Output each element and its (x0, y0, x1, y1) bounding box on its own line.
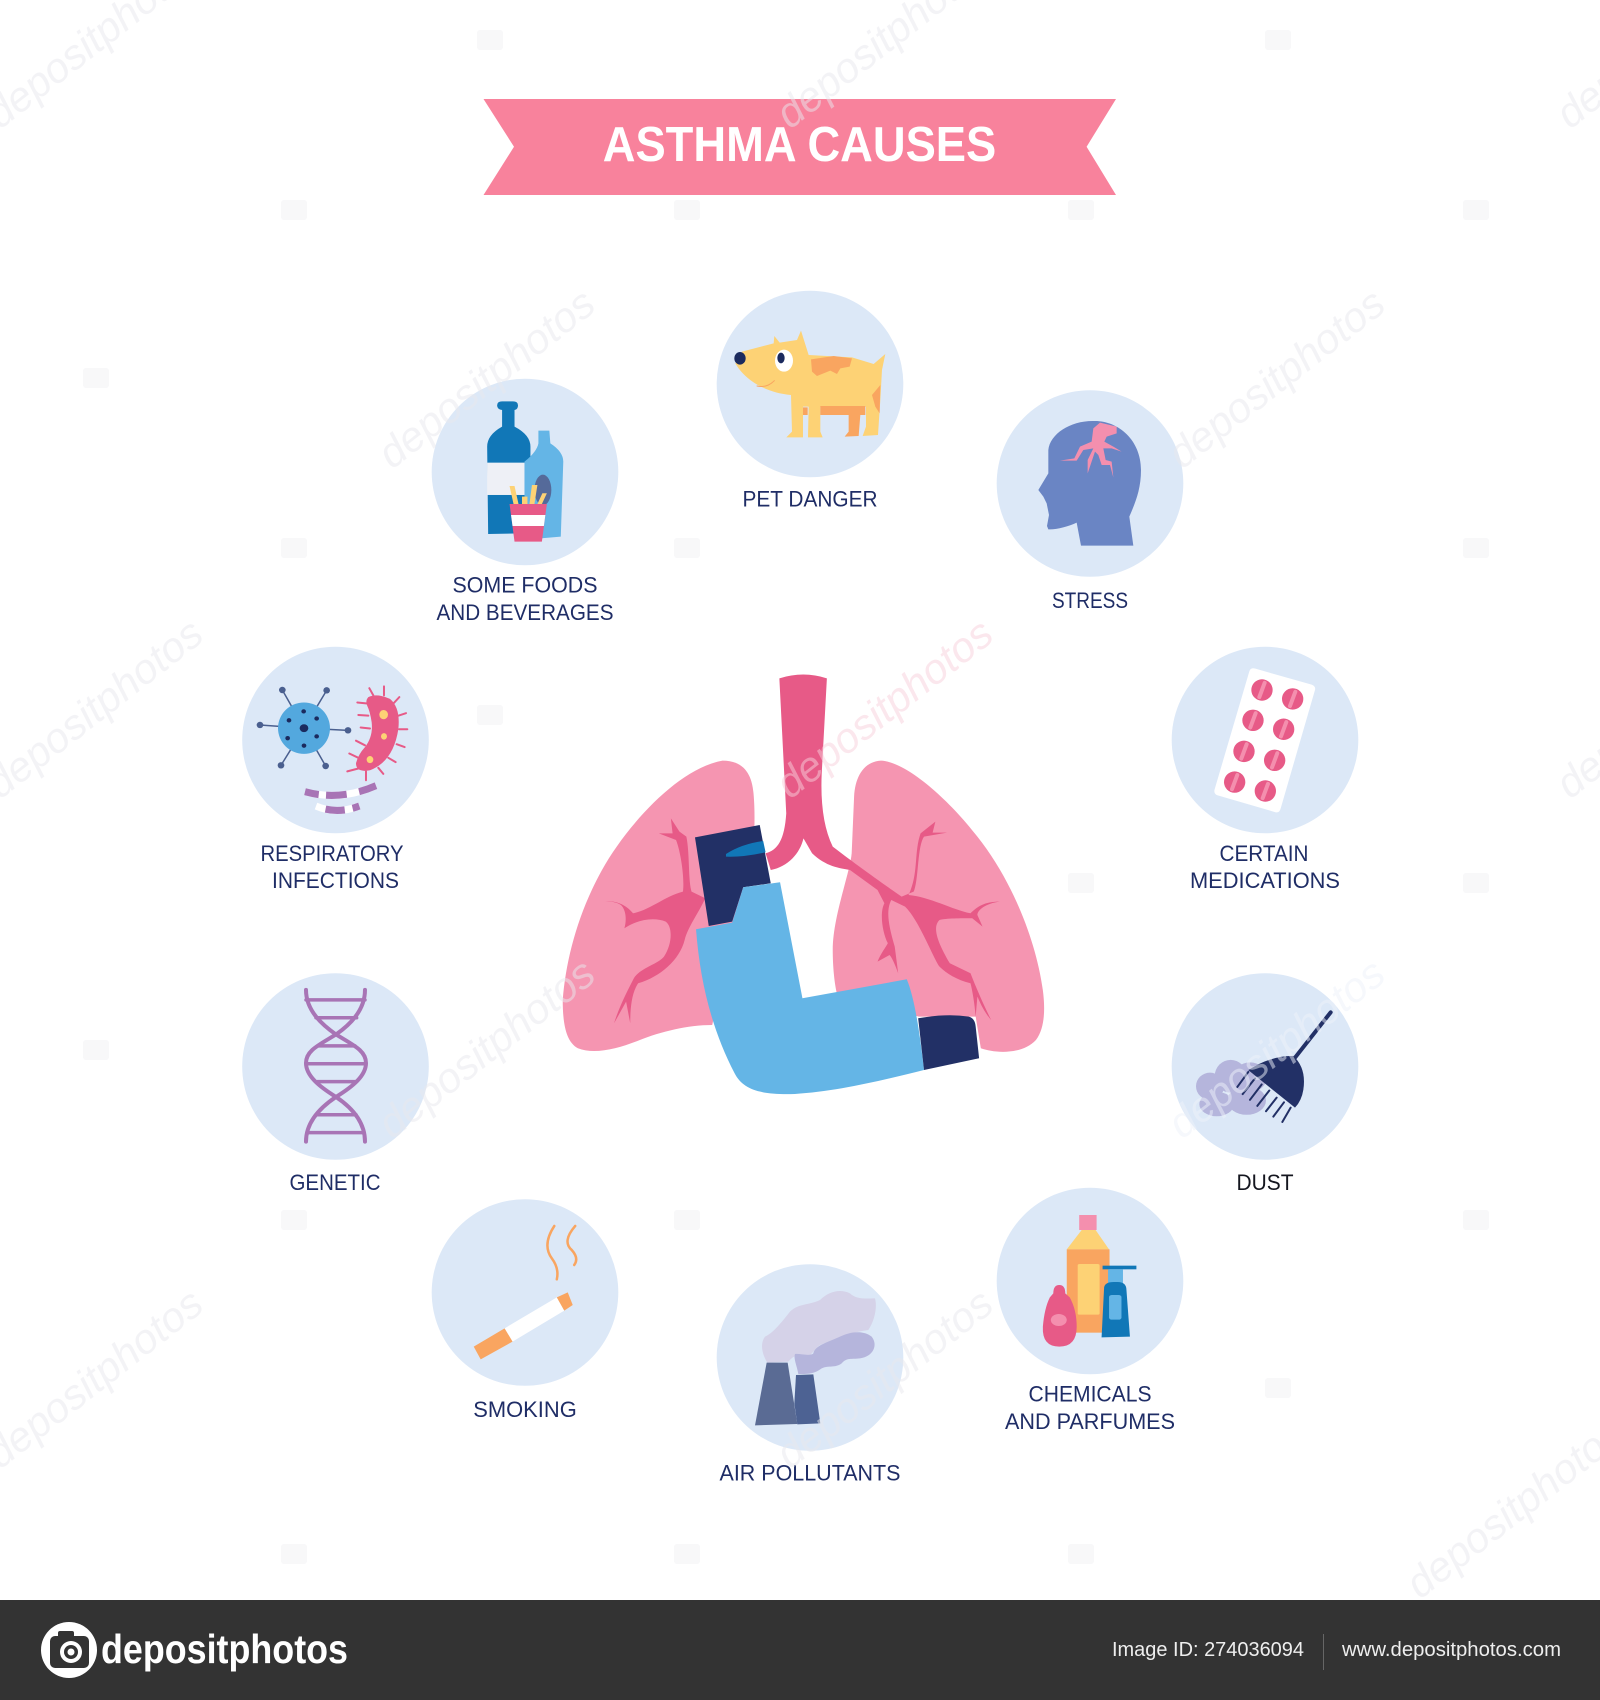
circle (717, 291, 903, 477)
label line two: AND BEVERAGES (436, 600, 614, 625)
left bronchi (605, 818, 705, 1023)
circle (1172, 973, 1358, 1160)
footer website: www.depositphotos.com (1341, 1639, 1561, 1661)
footer image id: Image ID: 274036094 (1112, 1639, 1304, 1661)
panel: chemicals and parfumes (997, 1188, 1183, 1434)
label: PET DANGER (742, 486, 878, 512)
label: SOME FOODS (452, 573, 598, 598)
stock photo watermarks: depositphotos (1159, 949, 1394, 1147)
faint camera watermark marks (83, 30, 1489, 1564)
title text: ASTHMA CAUSES (603, 118, 996, 172)
icon: virus and bacteria (257, 686, 407, 810)
stock photo watermarks: depositphotos (1159, 279, 1394, 477)
circle (242, 647, 429, 833)
icon: pill blister (1214, 668, 1315, 812)
trachea and bronchi (766, 674, 1000, 1020)
label line two: MEDICATIONS (1190, 868, 1340, 893)
label: SMOKING (473, 1397, 577, 1422)
footer logo icon: camera (41, 1622, 97, 1678)
inhaler canister (695, 825, 771, 926)
panel: some foods and beverages (432, 379, 618, 625)
icon: cigarette with smoke (474, 1226, 576, 1359)
circle (242, 973, 429, 1160)
panel: certain medications (1172, 647, 1358, 893)
icon: dog (734, 331, 885, 437)
circle (717, 1264, 903, 1451)
label: RESPIRATORY (260, 841, 404, 866)
panel: genetic (242, 973, 429, 1195)
left lung (563, 761, 755, 1051)
label line two: INFECTIONS (272, 868, 399, 893)
label: AIR POLLUTANTS (720, 1461, 900, 1486)
circle (432, 1199, 618, 1386)
icon: bottles and fries (487, 401, 563, 542)
stock photo watermarks: depositphotos (369, 949, 604, 1147)
stock photo watermarks: depositphotos (767, 609, 1002, 807)
label: DUST (1236, 1170, 1294, 1195)
right lung (833, 761, 1044, 1052)
label: GENETIC (290, 1170, 381, 1195)
panel: smoking (432, 1199, 618, 1422)
stock photo watermarks: depositphotos (767, 1279, 1002, 1477)
label: STRESS (1052, 588, 1128, 613)
panel: dust (1172, 973, 1358, 1195)
circle (1172, 647, 1358, 833)
circle (997, 1188, 1183, 1374)
panel: respiratory infections (242, 647, 429, 893)
central illustration: lungs and inhaler (563, 674, 1044, 1094)
icon: chemical bottles (1043, 1215, 1136, 1347)
icon: broom and dust cloud (1196, 1012, 1331, 1122)
stock photo watermarks: depositphotos (369, 279, 604, 477)
title banner (484, 99, 1116, 195)
inhaler mouth slit (726, 841, 766, 857)
inhaler cap (918, 1015, 979, 1070)
panel: pet danger (717, 291, 903, 512)
panel: air pollutants (717, 1264, 903, 1486)
panel: stress (997, 390, 1183, 613)
footer logo text: depositphotos (101, 1626, 348, 1672)
circle (432, 379, 618, 565)
inhaler body (696, 882, 924, 1094)
label: CERTAIN (1220, 841, 1308, 866)
label line two: AND PARFUMES (1005, 1409, 1175, 1434)
circle (997, 390, 1183, 577)
icon: factory chimneys with smoke (755, 1291, 876, 1425)
footer bar (0, 1600, 1600, 1700)
label: CHEMICALS (1028, 1382, 1152, 1407)
icon: dna helix (306, 990, 366, 1142)
icon: head with crack (1038, 421, 1141, 546)
